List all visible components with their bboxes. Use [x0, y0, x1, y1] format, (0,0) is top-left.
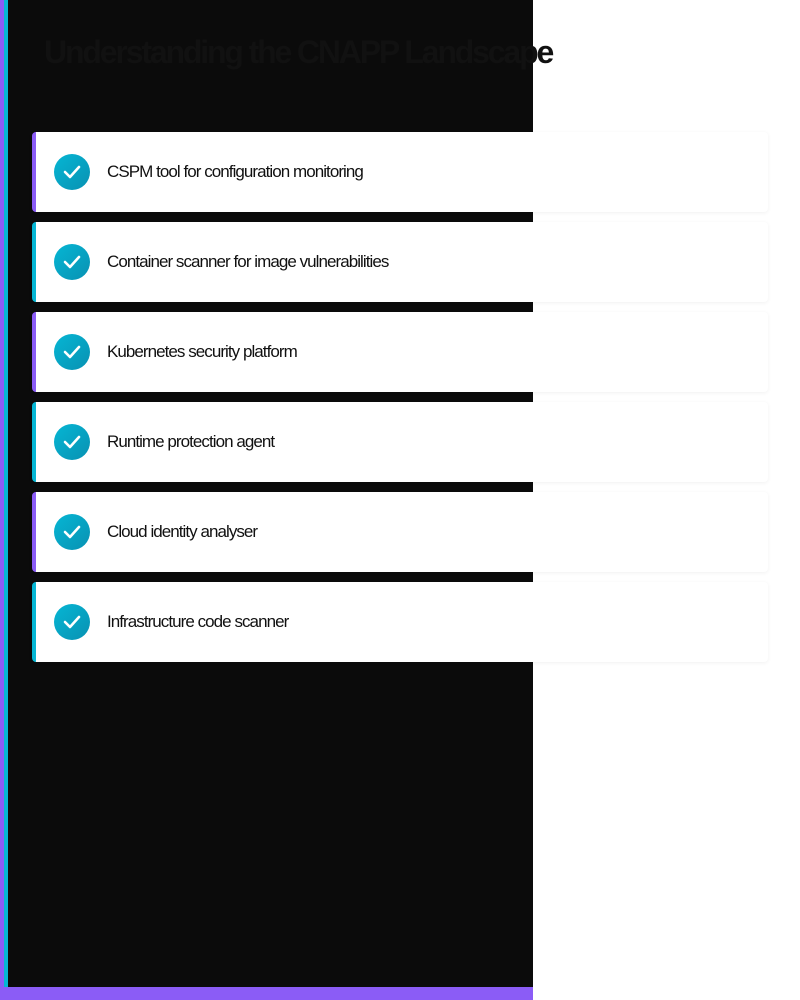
card: identity	[32, 492, 768, 572]
dark background panel	[0, 0, 533, 987]
card: CSPM: CSPM tool for configuration monitoring	[107, 162, 363, 181]
card: kubernetes: Kubernetes security platform	[107, 342, 297, 361]
card: identity: Cloud identity analyser	[107, 522, 257, 541]
card: IaC	[32, 582, 768, 662]
card: runtime	[32, 402, 768, 482]
card: kubernetes	[32, 312, 768, 392]
title: Understanding the CNAPP Landscape	[44, 34, 552, 70]
card: IaC: Infrastructure code scanner	[107, 612, 288, 631]
card: container scanner	[32, 222, 768, 302]
card: container scanner: Container scanner for image vulnerabilities	[107, 252, 388, 271]
card: CSPM	[32, 132, 768, 212]
left accent stripe	[0, 0, 8, 987]
card: runtime: Runtime protection agent	[107, 432, 274, 451]
bottom accent bar	[0, 987, 533, 1000]
